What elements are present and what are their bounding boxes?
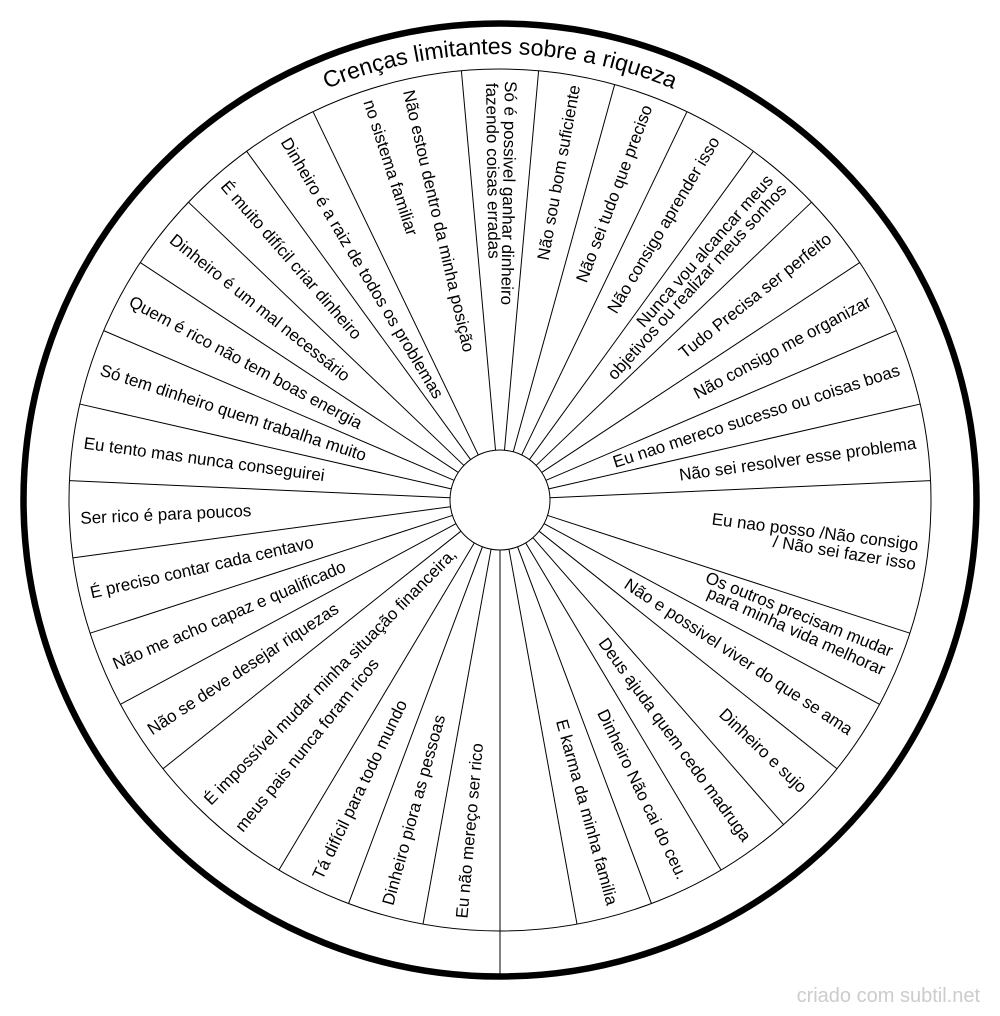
belief: Os outros precisam mudar: para minha vida melhorar xyxy=(704,583,888,679)
belief: Nunca vou alcancar meus objetivos: objetivos ou realizar meus sonhos xyxy=(604,180,790,384)
belief: Quem é rico não tem boas energia: Quem é rico não tem boas energia xyxy=(126,292,366,433)
belief: top two-line sector: fazendo coisas erradas xyxy=(482,83,503,259)
belief: Eu nao posso: / Não sei fazer isso xyxy=(772,532,917,574)
sector spokes xyxy=(69,71,931,976)
belief: Não estou dentro da minha posição xyxy=(359,88,478,354)
belief: Não sei tudo que preciso: Não sei tudo que preciso xyxy=(572,102,656,285)
belief: Eu tento mas nunca conseguirei: Eu tento mas nunca conseguirei xyxy=(83,434,326,485)
belief: Dinheiro é um mal necessário: Dinheiro é um mal necessário xyxy=(166,230,354,385)
center hub xyxy=(450,450,550,550)
footer credit: criado com subtil.net xyxy=(797,985,980,1007)
belief: Não consigo aprender isso: Não consigo aprender isso xyxy=(604,133,724,317)
belief: É impossível mudar minha situação: meus pais nunca foram ricos xyxy=(231,655,383,836)
belief: Dinheiro e sujo: Dinheiro e sujo xyxy=(715,705,811,797)
belief: Tá difícil para todo mundo: Tá difícil para todo mundo xyxy=(309,697,411,882)
belief: Os outros precisam mudar: Os outros precisam mudar xyxy=(703,568,896,661)
belief: Dinheiro Não cai do ceu: Dinheiro Não cai do ceu. xyxy=(593,706,691,882)
belief: Eu não mereço ser rico: Eu não mereço ser rico xyxy=(452,742,487,919)
belief: Tudo Precisa ser perfeito: Tudo Precisa ser perfeito xyxy=(675,229,835,362)
belief: Não estou dentro da minha posição: Não estou dentro da minha posição xyxy=(399,88,478,354)
belief: Não se deve desejar riquezas: Não se deve desejar riquezas xyxy=(144,599,342,739)
belief: Não estou dentro da minha posição: no sistema familiar xyxy=(359,97,421,238)
belief: Só tem dinheiro quem trabalha muito: Só tem dinheiro quem trabalha muito xyxy=(98,361,369,465)
belief: Nunca vou alcancar meus objetivos: Nunca vou alcancar meus xyxy=(633,171,777,331)
belief: E karma da minha familia: E karma da minha familia xyxy=(552,717,622,908)
belief: Ser rico é para poucos: Ser rico é para poucos xyxy=(80,501,252,528)
belief: Eu nao mereco sucesso: Eu nao mereco sucesso ou coisas boas xyxy=(611,361,902,472)
belief: Não me acho capaz e qualificado: Não me acho capaz e qualificado xyxy=(110,557,348,673)
belief: Deus ajuda quem cedo madruga: Deus ajuda quem cedo madruga xyxy=(595,634,755,846)
belief: top two-line sector xyxy=(482,81,520,305)
belief: É muito difícil criar dinheiro: É muito difícil criar dinheiro xyxy=(217,177,365,343)
belief: Não sou bom suficiente: Não sou bom suficiente xyxy=(534,83,584,262)
title: Crenças limitantes sobre a riqueza xyxy=(324,39,675,89)
belief: É preciso contar cada centavo: É preciso contar cada centavo xyxy=(88,533,315,602)
belief: top two-line sector: Só é possivel ganhar dinheiro xyxy=(497,81,520,305)
belief: Eu nao posso: Eu nao posso /Não consigo xyxy=(711,510,919,554)
belief: Não sei resolver esse problema: Não sei resolver esse problema xyxy=(678,434,918,485)
inner thin ring xyxy=(69,69,931,931)
belief: Não consigo me organizar: Não consigo me organizar xyxy=(690,292,874,403)
belief: Dinheiro piora as pessoas: Dinheiro piora as pessoas xyxy=(379,713,449,907)
belief: É impossível mudar minha situação: É impossível mudar minha situação financeira, xyxy=(200,545,460,809)
belief: Dinheiro é a raiz de todos os problemas: Dinheiro é a raiz de todos os problemas xyxy=(277,134,447,402)
belief: Eu nao posso xyxy=(711,510,919,574)
belief: Não e possivel viver do que se ama: Não e possivel viver do que se ama xyxy=(621,575,856,739)
